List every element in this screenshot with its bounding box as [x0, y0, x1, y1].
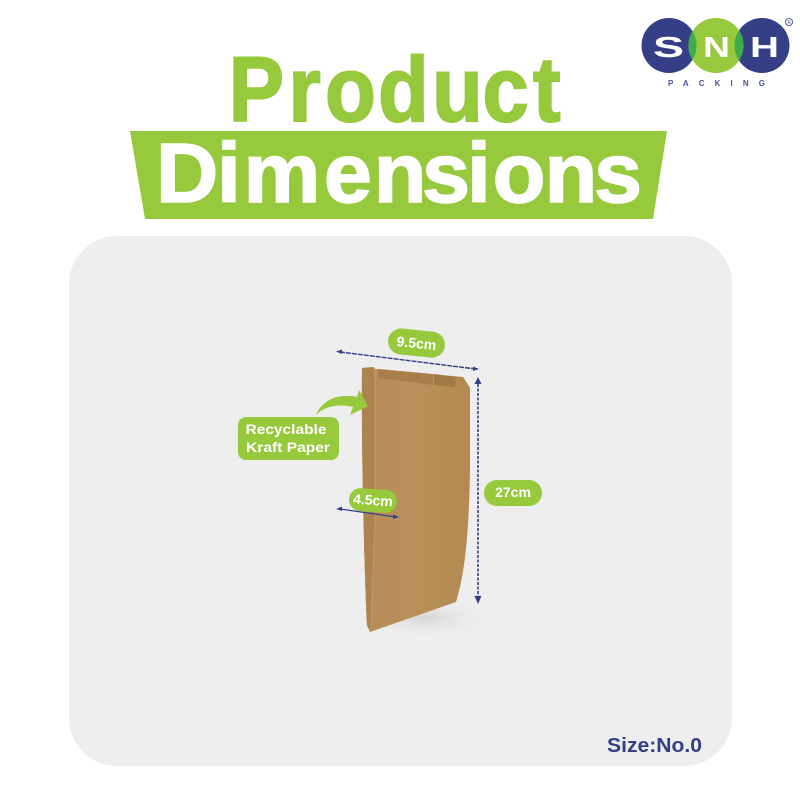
size label: Size:No.0 [607, 735, 702, 757]
dimension: height 27cm [474, 377, 542, 604]
callout: Recyclable Kraft Paper: Kraft Paper [246, 439, 331, 455]
logo: SNH Packing [642, 18, 793, 88]
logo: SNH Packing: PACKING [668, 79, 765, 88]
logo: SNH Packing: S [653, 32, 684, 64]
dimension: width 9.5cm: 9.5cm [396, 333, 437, 353]
dimension: height 27cm: 27cm [495, 484, 531, 500]
callout: Recyclable Kraft Paper [238, 417, 339, 460]
heading banner: Dimensions: Dimensions [156, 127, 642, 221]
title: Product: Product [229, 38, 561, 141]
dimension: width 9.5cm [336, 327, 479, 371]
dimension: depth 4.5cm [336, 487, 399, 519]
logo: SNH Packing: H [750, 32, 779, 64]
kraft paper bag [362, 367, 470, 632]
callout: Recyclable Kraft Paper: Recyclable [246, 421, 327, 437]
logo: SNH Packing: N [703, 32, 730, 64]
bag shadow [357, 596, 493, 640]
logo: SNH Packing: R [787, 20, 791, 26]
dimension: depth 4.5cm: 4.5cm [353, 491, 393, 509]
arrow: to bag [316, 390, 368, 415]
panel: product background [69, 236, 732, 766]
